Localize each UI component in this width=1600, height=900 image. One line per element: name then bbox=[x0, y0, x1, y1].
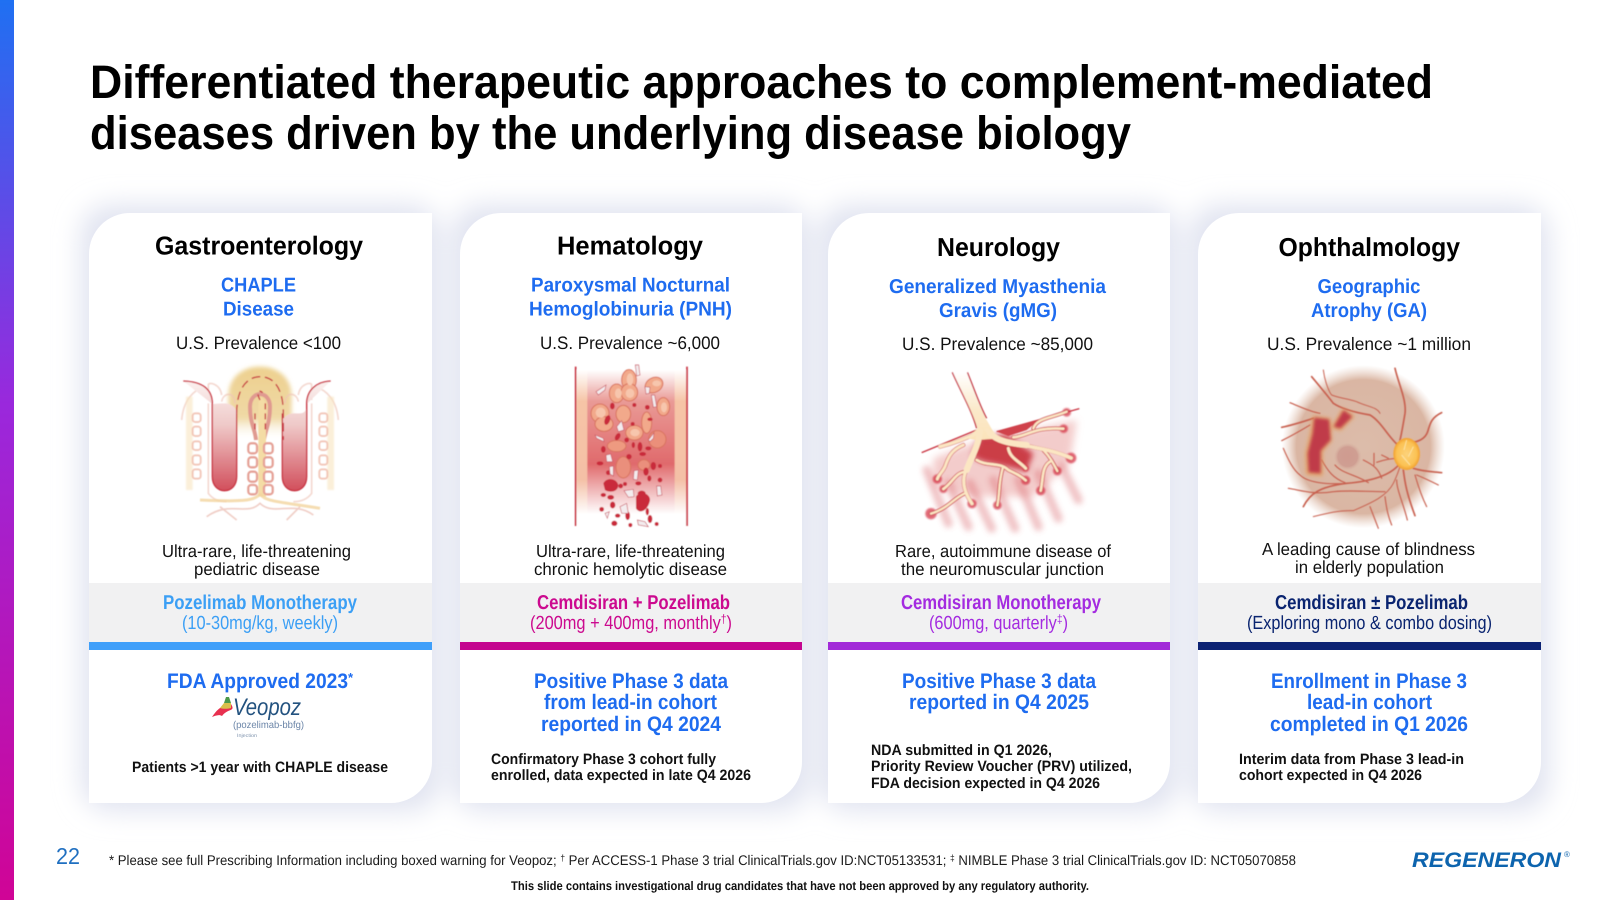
footnote: * Please see full Prescribing Information including boxed warning for Veopoz; bbox=[109, 852, 586, 868]
illustration: blood vessel with lysed cells bbox=[576, 365, 687, 527]
panel: neurology bbox=[828, 213, 1170, 803]
therapy band: Cemdisiran + Pozelimab bbox=[537, 592, 730, 614]
panel: gastroenterology bbox=[89, 213, 432, 803]
therapy band: Cemdisiran ± Pozelimab bbox=[1275, 592, 1468, 614]
status: Positive Phase 3 data bbox=[534, 670, 728, 693]
card background bbox=[1198, 213, 1541, 803]
description: Ultra-rare, life-threatening bbox=[162, 541, 351, 561]
disease name: Gravis (gMG) bbox=[939, 300, 1057, 322]
title: Differentiated therapeutic approaches to complement-mediated bbox=[90, 55, 1433, 108]
logo: Veopoz: Veopoz bbox=[233, 694, 301, 721]
therapy band: Cemdisiran Monotherapy bbox=[901, 592, 1102, 614]
therapy band bbox=[460, 583, 802, 650]
therapy band: Pozelimab Monotherapy bbox=[163, 592, 358, 614]
status: Positive Phase 3 data bbox=[902, 670, 1096, 693]
footnote: † bbox=[560, 853, 565, 863]
note: Confirmatory Phase 3 cohort fully bbox=[491, 751, 717, 768]
description bbox=[534, 541, 727, 579]
description: Ultra-rare, life-threatening bbox=[536, 541, 725, 561]
therapy band bbox=[1198, 583, 1541, 650]
left gradient bar bbox=[0, 0, 14, 900]
disease name: Generalized Myasthenia bbox=[889, 276, 1107, 298]
status: Enrollment in Phase 3 bbox=[1271, 670, 1467, 693]
card shadows bbox=[81, 205, 1549, 811]
therapy band: (Exploring mono & combo dosing) bbox=[1247, 613, 1492, 634]
prevalence: U.S. Prevalence ~1 million bbox=[1267, 334, 1471, 354]
logo: Veopoz bbox=[212, 694, 304, 739]
illustration: retina with geographic atrophy bbox=[1282, 365, 1445, 528]
description: in elderly population bbox=[1295, 557, 1444, 577]
description: A leading cause of blindness bbox=[1262, 539, 1475, 559]
card background bbox=[460, 213, 802, 803]
footnote: NIMBLE Phase 3 trial ClinicalTrials.gov ID: NCT05070858 bbox=[955, 852, 1296, 868]
therapy band: † bbox=[721, 612, 727, 626]
note: enrolled, data expected in late Q4 2026 bbox=[491, 767, 751, 784]
therapy band: (600mg, quarterly bbox=[929, 613, 1078, 634]
card background bbox=[89, 213, 432, 803]
description bbox=[162, 541, 351, 579]
therapy band: (10-30mg/kg, weekly) bbox=[182, 613, 338, 634]
disease name bbox=[529, 274, 732, 320]
description: chronic hemolytic disease bbox=[534, 559, 727, 579]
status: * bbox=[348, 670, 354, 685]
disease name: Atrophy (GA) bbox=[1311, 300, 1427, 322]
status bbox=[902, 670, 1096, 714]
logo: Veopoz: Injection bbox=[237, 733, 257, 739]
therapy band bbox=[89, 583, 432, 650]
footnote: Per ACCESS-1 Phase 3 trial ClinicalTrials.gov ID:NCT05133531; bbox=[565, 852, 950, 868]
therapy band bbox=[828, 583, 1170, 650]
status bbox=[1270, 670, 1468, 736]
status: from lead-in cohort bbox=[544, 691, 717, 714]
note bbox=[871, 742, 1132, 792]
description: pediatric disease bbox=[194, 559, 320, 579]
heading: Ophthalmology bbox=[1278, 232, 1461, 262]
status: FDA Approved 2023 bbox=[167, 670, 348, 693]
panel: hematology bbox=[460, 213, 802, 803]
note: cohort expected in Q4 2026 bbox=[1239, 767, 1422, 784]
status: completed in Q1 2026 bbox=[1270, 713, 1468, 736]
note bbox=[1239, 751, 1464, 784]
disease name: Geographic bbox=[1318, 276, 1420, 298]
prevalence: U.S. Prevalence ~6,000 bbox=[540, 333, 720, 353]
status bbox=[534, 670, 728, 736]
description: Rare, autoimmune disease of bbox=[895, 541, 1111, 561]
note: FDA decision expected in Q4 2026 bbox=[871, 775, 1100, 792]
logo: Veopoz: (pozelimab-bbfg) bbox=[233, 720, 304, 731]
status: reported in Q4 2025 bbox=[909, 691, 1089, 714]
prevalence: U.S. Prevalence <100 bbox=[176, 333, 341, 353]
disease name: Paroxysmal Nocturnal bbox=[531, 274, 730, 296]
note: Patients >1 year with CHAPLE disease bbox=[132, 759, 388, 776]
disease name: Disease bbox=[223, 298, 294, 320]
therapy band: ‡ bbox=[1057, 612, 1063, 626]
note: Interim data from Phase 3 lead-in bbox=[1239, 751, 1464, 768]
therapy band: ) bbox=[727, 613, 732, 634]
disease name: Hemoglobinuria (PNH) bbox=[529, 298, 732, 320]
prevalence: U.S. Prevalence ~85,000 bbox=[902, 334, 1093, 354]
description: the neuromuscular junction bbox=[901, 559, 1104, 579]
therapy band: ) bbox=[1063, 613, 1068, 634]
illustration: neuromuscular junction bbox=[922, 372, 1079, 528]
footnote: ‡ bbox=[950, 853, 955, 863]
disease name bbox=[221, 274, 296, 320]
status: reported in Q4 2024 bbox=[541, 713, 721, 736]
panel: ophthalmology bbox=[1198, 213, 1541, 803]
description bbox=[895, 541, 1111, 579]
description bbox=[1262, 539, 1475, 577]
page number: 22 bbox=[56, 843, 80, 869]
note: NDA submitted in Q1 2026, bbox=[871, 742, 1052, 759]
heading: Neurology bbox=[937, 232, 1061, 262]
heading: Gastroenterology bbox=[155, 230, 364, 260]
disease name: CHAPLE bbox=[221, 274, 296, 296]
therapy band: (200mg + 400mg, monthly bbox=[530, 613, 751, 634]
disclaimer: This slide contains investigational drug candidates that have not been approved by any regulatory authority. bbox=[511, 879, 1089, 893]
logo: Regeneron: REGENERON bbox=[1412, 849, 1562, 872]
card background bbox=[828, 213, 1170, 803]
illustration: intestinal villus bbox=[182, 367, 338, 520]
status: lead-in cohort bbox=[1307, 691, 1432, 714]
title: diseases driven by the underlying disease biology bbox=[90, 106, 1131, 159]
heading: Hematology bbox=[557, 230, 704, 260]
logo: Regeneron: ® bbox=[1564, 850, 1570, 859]
note bbox=[491, 751, 751, 784]
disease name bbox=[889, 276, 1107, 322]
note: Priority Review Voucher (PRV) utilized, bbox=[871, 758, 1132, 775]
disease name bbox=[1311, 276, 1427, 322]
title bbox=[90, 55, 1433, 159]
